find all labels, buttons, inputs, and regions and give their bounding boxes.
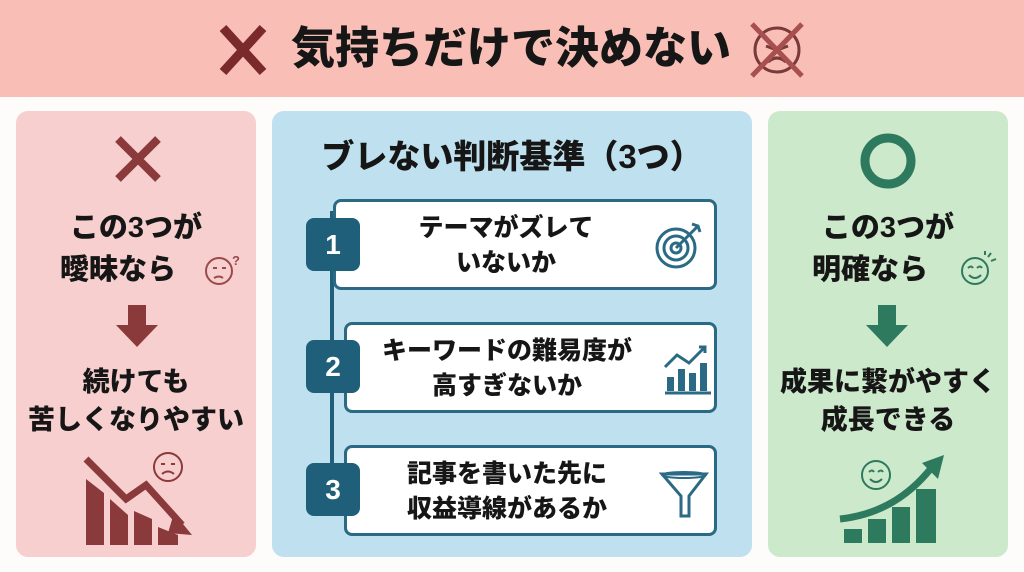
badge 2: 2 [325,351,341,382]
icon: header X [220,25,266,75]
badge 2 [306,340,360,393]
icon: thinking face [205,253,240,285]
text: result: 成長できる [821,405,955,435]
card 3 [344,445,717,536]
text: result: 成果に繋がやすく [780,367,996,397]
card 2: 高すぎないか [432,372,582,400]
text: result: 苦しくなりやすい [28,405,244,435]
arrow: down [116,305,158,347]
icon: funnel [659,471,709,518]
heading: ブレない判断基準（3つ） [321,138,703,175]
icon: target [656,222,702,268]
text: result [28,367,244,435]
panel: criteria [272,111,752,557]
icon: thinking face: ? [232,253,240,268]
text: result: 続けても [83,367,189,397]
text: result [780,366,996,435]
icon: declining chart [84,452,192,545]
panel: right (clear) [768,111,1008,557]
card 3: 収益導線があるか [407,495,607,523]
connector line [330,211,334,501]
badge 3: 3 [325,474,341,505]
badge 1 [306,218,360,271]
icon: X mark [115,136,161,182]
icon: growth chart [840,455,944,543]
title: 気持ちだけで決めない [291,24,731,73]
panel: left (ambiguous) [16,111,256,557]
icon: circle mark [860,134,916,188]
card 1: いないか [456,249,556,277]
card 1 [333,199,717,290]
card 2 [344,322,717,413]
icon: crossed angry face [750,22,804,78]
icon: bar chart [664,346,711,394]
text: condition: この3つが [822,212,954,244]
header band [0,0,1024,97]
text: condition [60,211,202,286]
text: condition: 明確なら [812,254,928,286]
arrow: down [866,305,908,347]
text: condition: この3つが [70,212,202,244]
card 2: キーワードの難易度が [382,337,632,365]
badge 1: 1 [325,229,341,260]
card 3: 記事を書いた先に [407,460,607,488]
icon: smile [961,251,996,285]
text: condition [812,211,954,286]
card 1: テーマがズレて [418,214,594,242]
text: condition: 曖昧なら [60,254,176,286]
badge 3 [306,463,360,516]
